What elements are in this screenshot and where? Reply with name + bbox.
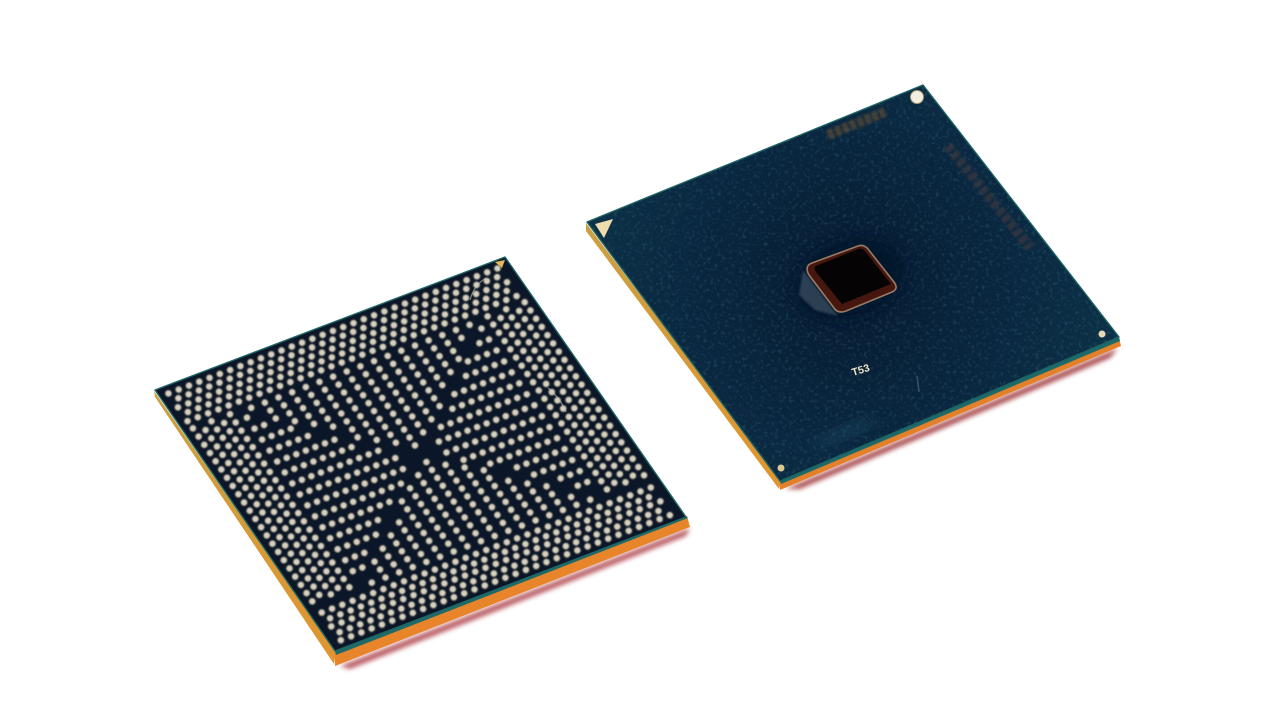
underfill bbox=[799, 270, 838, 316]
die bbox=[807, 245, 896, 312]
corner dot bottom bbox=[778, 464, 784, 472]
surface speckle bbox=[580, 80, 1125, 485]
bottom edge of substrate bbox=[780, 337, 1121, 490]
corner dot right bbox=[1098, 330, 1106, 338]
laser mark: right edge bbox=[948, 146, 1030, 248]
corner marker bbox=[495, 260, 505, 268]
pin one dot bbox=[910, 90, 924, 104]
die halo bbox=[784, 224, 916, 334]
top surface bbox=[587, 85, 1119, 481]
teal laminate band bbox=[780, 337, 1120, 484]
photo: two chip packages on white bbox=[154, 84, 1121, 672]
teal laminate band bbox=[335, 516, 688, 655]
left edge of substrate bbox=[154, 391, 336, 664]
pin one triangle bbox=[595, 219, 613, 238]
bottom edge of substrate bbox=[335, 516, 690, 666]
chip shadow bbox=[340, 528, 690, 669]
top surface bbox=[155, 257, 686, 651]
chip shadow bbox=[785, 348, 1118, 489]
tick mark bbox=[917, 376, 919, 392]
scratches bbox=[470, 278, 566, 412]
die top bbox=[814, 249, 891, 304]
lighter patch near lower edge bbox=[812, 415, 878, 449]
package code: T53 bbox=[850, 362, 871, 379]
solder ball grid bbox=[168, 267, 672, 641]
left edge of substrate bbox=[586, 223, 781, 489]
laser mark: top edge bbox=[828, 112, 885, 135]
die edge bbox=[807, 245, 896, 312]
chip: solder ball side (left) bbox=[154, 257, 690, 669]
chip: die side (right) bbox=[580, 80, 1125, 490]
